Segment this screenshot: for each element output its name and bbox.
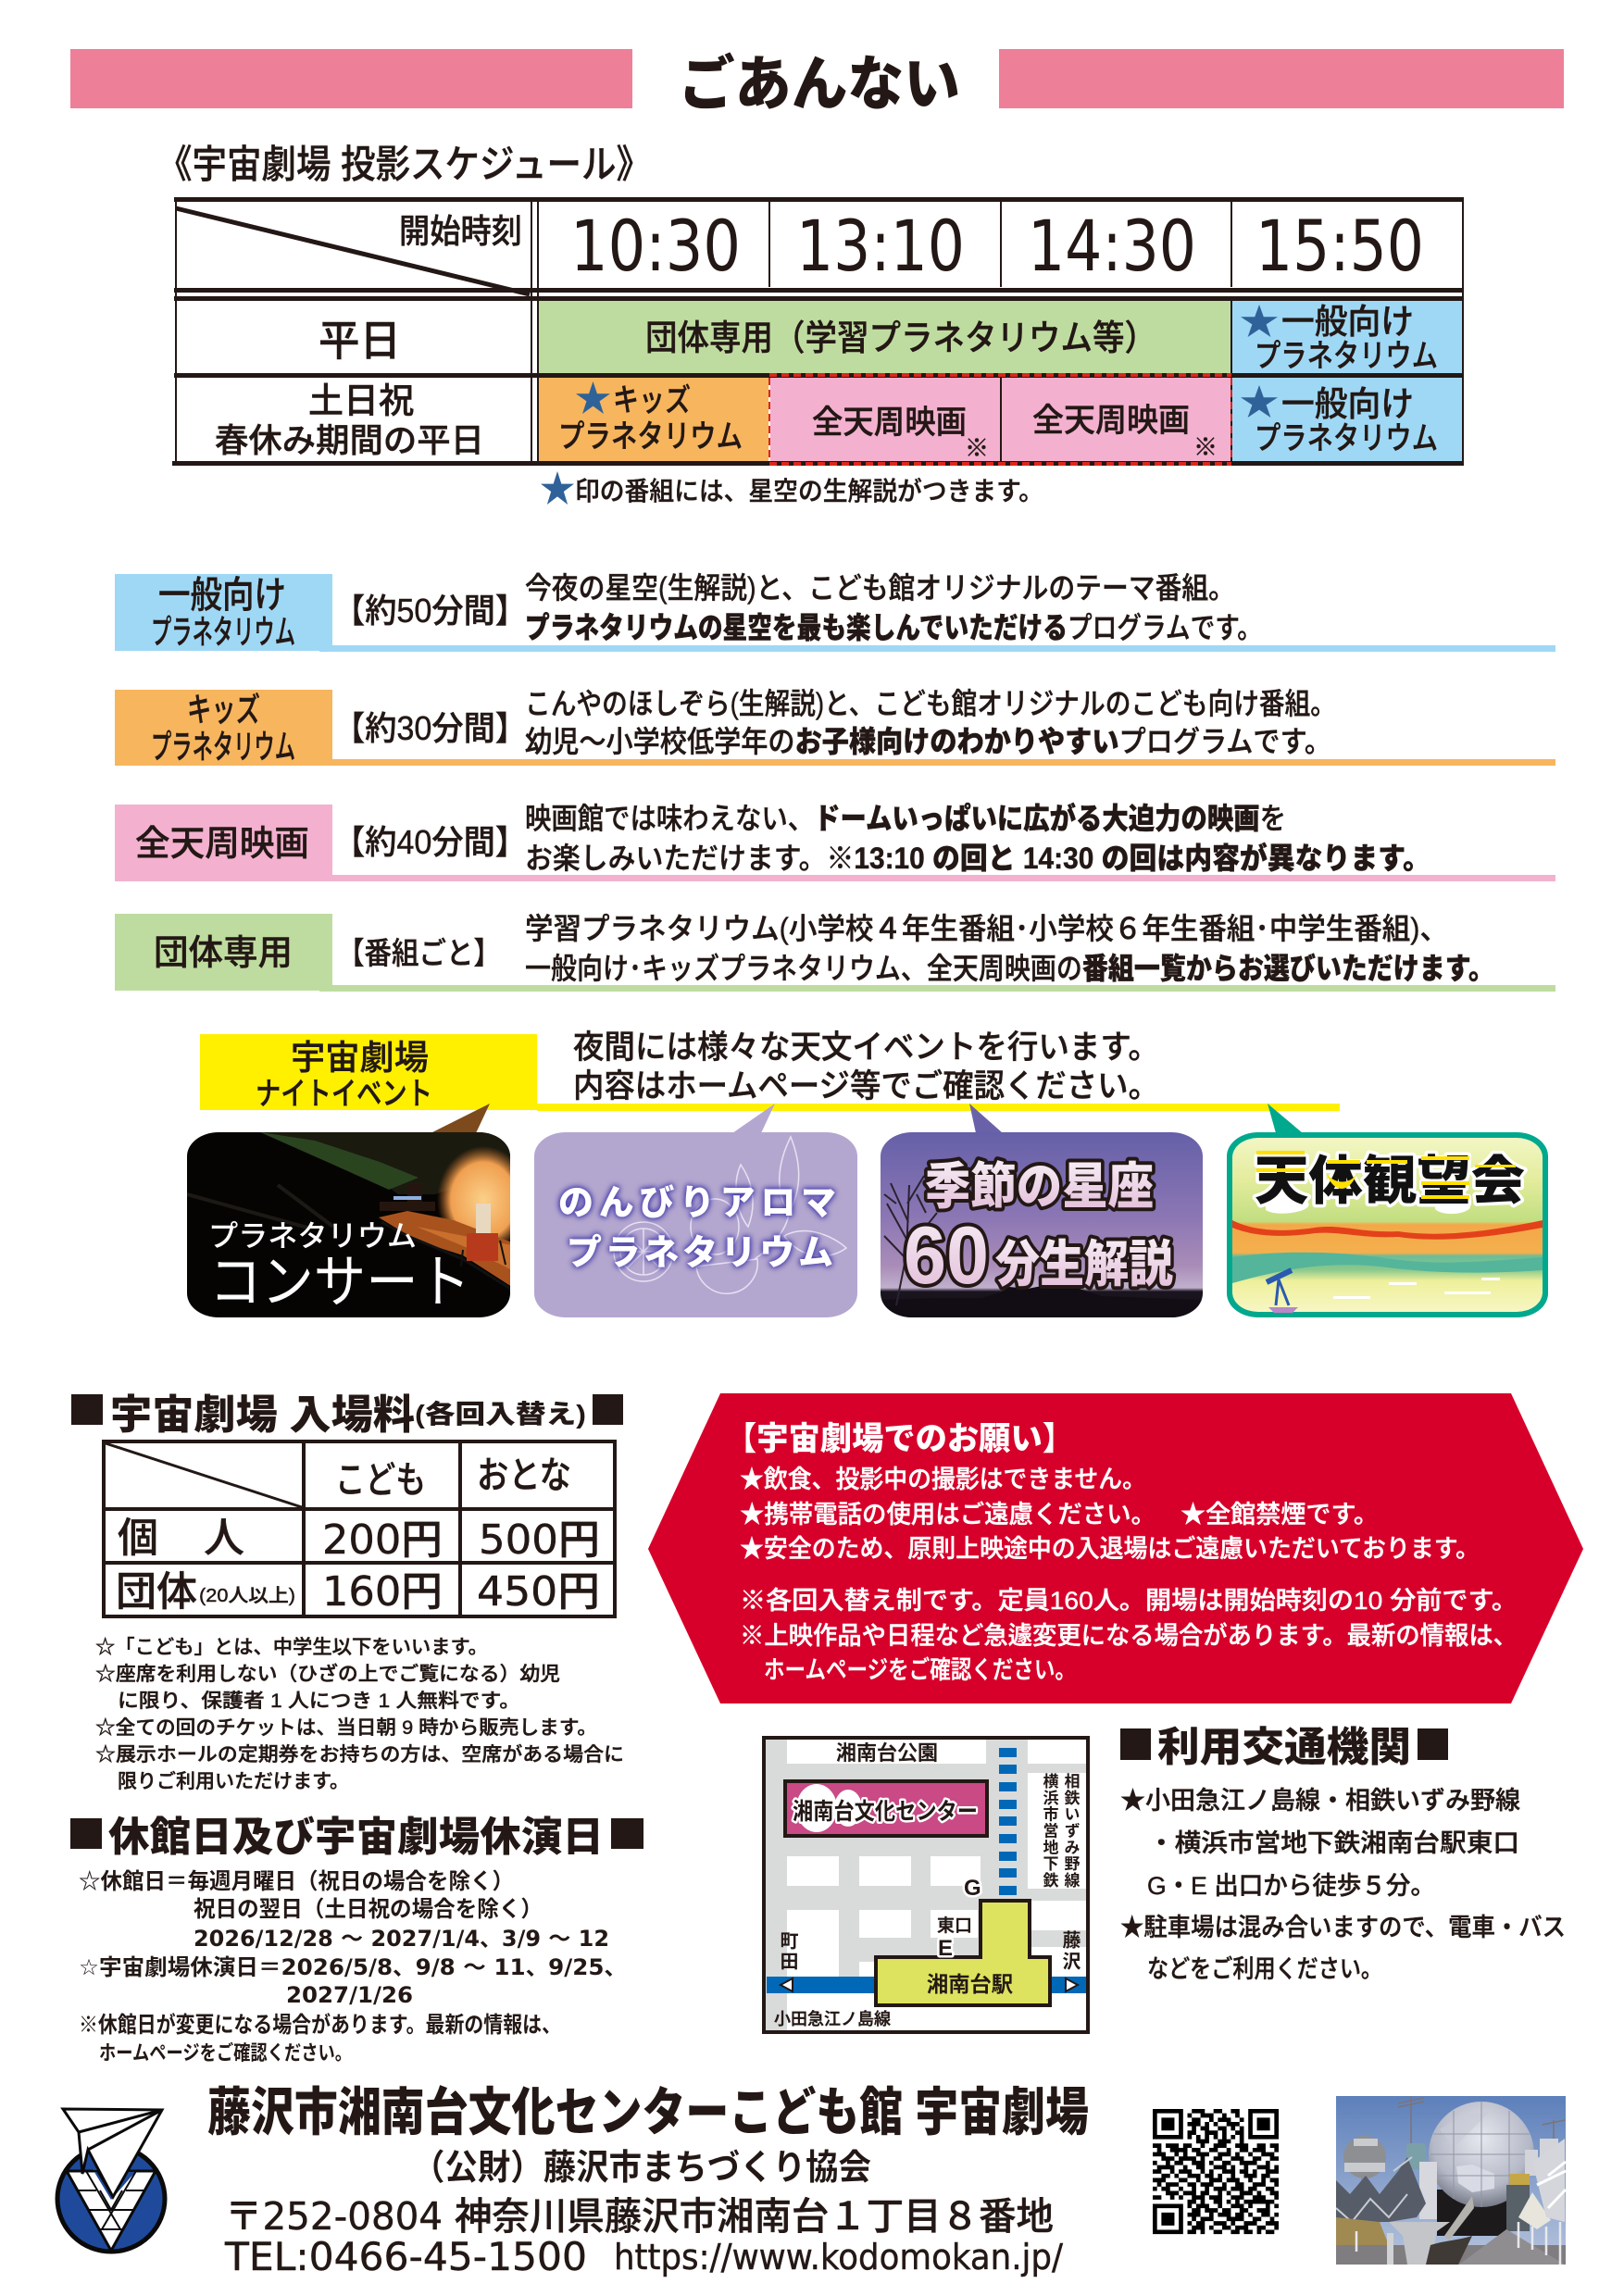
admission table: 団体 [116, 1569, 197, 1615]
cell: holiday dome films [770, 378, 1230, 462]
programme: general planetarium: プラネタリウムの星空を最も楽しんでいただけるプログラムです。 [525, 611, 1262, 644]
row labels [215, 317, 484, 459]
event card: stargazing: 天体観望会 [1255, 1152, 1525, 1211]
red notice panel: ★飲食、投影中の撮影はできません。 [740, 1466, 1146, 1493]
night events header: ナイトイベント [256, 1077, 432, 1112]
admission table: こども [335, 1460, 426, 1501]
cell labels: ※ [965, 434, 989, 462]
programme: dome film: お楽しみいただけます。※13:10 の回と 14:30 の回は内容が異なります。 [525, 842, 1430, 875]
time labels: 開始時刻 [399, 212, 522, 250]
programme: group only: 【番組ごと】 [337, 936, 501, 970]
admission notes [95, 1637, 624, 1792]
access map: 湘南台公園 [836, 1741, 938, 1765]
access text: ★駐車場は混み合いますので、電車・バス [1120, 1914, 1566, 1941]
admission table: 人 [204, 1516, 244, 1561]
programme: general planetarium: 【約50分間】 [333, 592, 527, 630]
admission notes: に限り、保護者 1 人につき 1 人無料です。 [118, 1691, 520, 1712]
footer: organisation name: https://www.kodomokan.jp/ [614, 2237, 1063, 2277]
event card: seasonal constellations [881, 1104, 1203, 1317]
row labels: 春休み期間の平日 [215, 421, 484, 459]
cell: holiday kids [539, 378, 768, 462]
programme: dome film [115, 802, 1555, 881]
access text: ★小田急江ノ島線・相鉄いずみ野線 [1120, 1787, 1520, 1815]
programme: general planetarium: 一般向け [158, 575, 286, 616]
event card: relaxing aroma planetarium [534, 1104, 857, 1317]
cell labels: プラネタリウム [558, 419, 743, 455]
yellow title accents [1256, 1151, 1516, 1199]
event card: seasonal constellations: 60 [904, 1209, 989, 1301]
event card: stargazing [1227, 1104, 1548, 1317]
cell: holiday general [1232, 378, 1462, 462]
cell labels: ※ [1193, 433, 1218, 461]
footer: organisation name: （公財）藤沢市まちづくり協会 [412, 2149, 871, 2188]
event card: planetarium concert [187, 1104, 530, 1317]
night events description: 内容はホームページ等でご確認ください。 [573, 1068, 1159, 1104]
cell labels: プラネタリウム [1255, 339, 1438, 374]
footer: organisation name: 藤沢市湘南台文化センターこども館 宇宙劇場 [207, 2083, 1089, 2141]
night events header [200, 1034, 1340, 1112]
closed days text [79, 1869, 627, 2065]
admission table: 200円 [322, 1516, 443, 1564]
culture centre [785, 1781, 987, 1836]
red notice panel: ★携帯電話の使用はご遠慮ください。 [740, 1501, 1156, 1529]
red notice panel: 【宇宙劇場でのお願い】 [725, 1421, 1074, 1457]
access map: G [964, 1876, 981, 1901]
station [876, 1901, 1050, 2005]
red notice panel: ※各回入替え制です。定員160人。開場は開始時刻の10 分前です。 [740, 1587, 1518, 1615]
programme: group only [115, 912, 1555, 992]
closed days text: ※休館日が変更になる場合があります。最新の情報は、 [79, 2012, 561, 2038]
red notice panel: ホームページをご確認ください。 [764, 1656, 1076, 1684]
night events description [573, 1029, 1159, 1104]
table footnote: 印の番組には、星空の生解説がつきます。 [575, 477, 1043, 505]
cell labels: 全天周映画 [1032, 403, 1190, 439]
subway line [999, 1748, 1017, 1895]
icon: telescope [1267, 1270, 1298, 1313]
header band: ごあんない: ごあんない [679, 51, 960, 118]
admission table: おとな [477, 1455, 571, 1496]
access map: 相鉄いずみ野線 [1061, 1773, 1080, 1889]
programme: group only: 学習プラネタリウム(小学校４年生番組･小学校６年生番組･中学生番組)、 [525, 912, 1448, 945]
row labels: 平日 [319, 317, 401, 365]
event card: relaxing aroma planetarium: プラネタリウム [567, 1234, 833, 1273]
event card: planetarium concert: コンサート [209, 1251, 470, 1315]
cell labels [558, 303, 1438, 462]
programme: dome film: 映画館では味わえない、ドームいっぱいに広がる大迫力の映画を [525, 802, 1286, 835]
cell labels: プラネタリウム [1255, 421, 1438, 456]
night events header: 宇宙劇場 [291, 1039, 429, 1077]
admission table [104, 1441, 615, 1616]
access map: 湘南台文化センター [793, 1799, 978, 1825]
cell: weekday general [1232, 298, 1462, 375]
heading: admission [71, 1392, 623, 1438]
red dashed outline [769, 375, 1231, 464]
access text: などをご利用ください。 [1147, 1955, 1382, 1983]
schedule table [172, 197, 1464, 466]
red notice panel: ★安全のため、原則上映途中の入退場はご遠慮いただいております。 [740, 1535, 1480, 1563]
time labels: 14:30 [1028, 205, 1196, 287]
cell labels: 団体専用（学習プラネタリウム等） [645, 319, 1156, 358]
programme: kids planetarium: こんやのほしぞら(生解説)と、こども館オリジナルのこども向け番組。 [525, 687, 1336, 720]
programme: kids planetarium: 【約30分間】 [333, 709, 527, 747]
programme: general planetarium [115, 571, 1555, 652]
admission notes: 限りご利用いただけます。 [118, 1771, 349, 1792]
cell: weekday group-only [539, 298, 1230, 375]
admission notes: ☆「こども」とは、中学生以下をいいます。 [95, 1637, 488, 1658]
footer: organisation name: TEL:0466-45-1500 [224, 2234, 587, 2279]
cell labels: 全天周映画 [812, 405, 967, 441]
event card: relaxing aroma planetarium: のんびりアロマ [558, 1184, 836, 1223]
access map: E [938, 1936, 953, 1961]
programme: general planetarium: 今夜の星空(生解説)と、こども館オリジナルのテーマ番組。 [525, 571, 1235, 605]
programme: general planetarium: プラネタリウム [151, 613, 295, 651]
closed days text: 2026/12/28 ～ 2027/1/4、3/9 ～ 12 [194, 1926, 609, 1952]
heading: admission: 宇宙劇場 入場料 [110, 1392, 415, 1438]
header band: ごあんない [70, 49, 1564, 118]
time labels: 10:30 [570, 205, 741, 287]
programme: kids planetarium [115, 687, 1555, 766]
footer: organisation name: 〒252-0804 神奈川県藤沢市湘南台１丁目８番地 [225, 2194, 1054, 2239]
programme: group only: 団体専用 [154, 934, 293, 973]
cell labels: 一般向け [1281, 385, 1414, 423]
access map: 藤沢 [1059, 1930, 1081, 1970]
admission table: 450円 [477, 1568, 600, 1616]
time labels: 15:50 [1255, 205, 1424, 287]
closed days text: ☆宇宙劇場休演日＝2026/5/8、9/8 ～ 11、9/25、 [79, 1954, 627, 1980]
admission table: 160円 [322, 1568, 443, 1616]
access text: G・E 出口から徒歩５分。 [1147, 1872, 1435, 1900]
icon: kodomokan logo [57, 2109, 165, 2252]
admission notes: ☆座席を利用しない（ひざの上でご覧になる）幼児 [95, 1663, 560, 1685]
QR code [1153, 2109, 1279, 2234]
access map: 小田急江ノ島線 [774, 2010, 891, 2028]
access map: 東口 [937, 1915, 972, 1936]
access map: 湘南台駅 [927, 1972, 1013, 1996]
programme: kids planetarium: 幼児～小学校低学年のお子様向けのわかりやすいプログラムです。 [525, 725, 1331, 758]
access map: 町田 [777, 1931, 797, 1970]
event card: seasonal constellations: 季節の星座 [925, 1159, 1154, 1215]
closed days text: ☆休館日＝毎週月曜日（祝日の場合を除く） [79, 1869, 514, 1894]
heading: admission: (各回入替え) [415, 1399, 586, 1429]
programme: dome film: 【約40分間】 [333, 823, 527, 861]
admission notes: ☆全ての回のチケットは、当日朝 9 時から販売します。 [95, 1717, 597, 1739]
admission table: 500円 [479, 1516, 600, 1564]
heading: closed days: 休館日及び宇宙劇場休演日 [108, 1815, 604, 1860]
programme: kids planetarium: キッズ [187, 691, 260, 729]
red notice panel: ※上映作品や日程など急遽変更になる場合があります。最新の情報は、 [740, 1622, 1518, 1650]
closed days text: 祝日の翌日（土日祝の場合を除く） [194, 1897, 543, 1922]
footer: organisation name [207, 2083, 1089, 2279]
event card: seasonal constellations: 分生解説 [995, 1237, 1173, 1292]
heading: access: 利用交通機関 [1157, 1725, 1411, 1770]
time labels: 13:10 [796, 205, 965, 287]
event card: planetarium concert: プラネタリウム [208, 1219, 417, 1253]
row labels: 土日祝 [308, 382, 414, 421]
access map [764, 1738, 1088, 2032]
red notice panel [648, 1393, 1583, 1703]
admission table: 個 [118, 1516, 158, 1561]
table rules [172, 197, 1464, 466]
odakyu line [767, 1977, 1086, 1993]
night events description: 夜間には様々な天文イベントを行います。 [573, 1029, 1159, 1066]
time labels [399, 205, 1424, 287]
closed days text: 2027/1/26 [286, 1982, 413, 2008]
red notice panel: ★全館禁煙です。 [1181, 1501, 1379, 1529]
admission notes: ☆展示ホールの定期券をお持ちの方は、空席がある場合に [95, 1744, 624, 1766]
access text: ・横浜市営地下鉄湘南台駅東口 [1148, 1829, 1519, 1857]
cell labels: キッズ [613, 383, 691, 418]
programme: kids planetarium: プラネタリウム [151, 728, 295, 766]
cell labels: 一般向け [1281, 303, 1414, 341]
admission table: (20人以上) [199, 1585, 295, 1606]
programme: dome film: 全天周映画 [135, 825, 309, 864]
photo: planetarium building [1336, 2096, 1566, 2265]
access map: 横浜市営地下鉄 [1041, 1773, 1058, 1889]
heading: schedule: 《宇宙劇場 投影スケジュール》 [157, 143, 651, 186]
closed days text: ホームページをご確認ください。 [99, 2041, 352, 2065]
access text [1120, 1787, 1566, 1983]
programme: group only: 一般向け･キッズプラネタリウム、全天周映画の番組一覧からお選びいただけます。 [525, 952, 1494, 985]
